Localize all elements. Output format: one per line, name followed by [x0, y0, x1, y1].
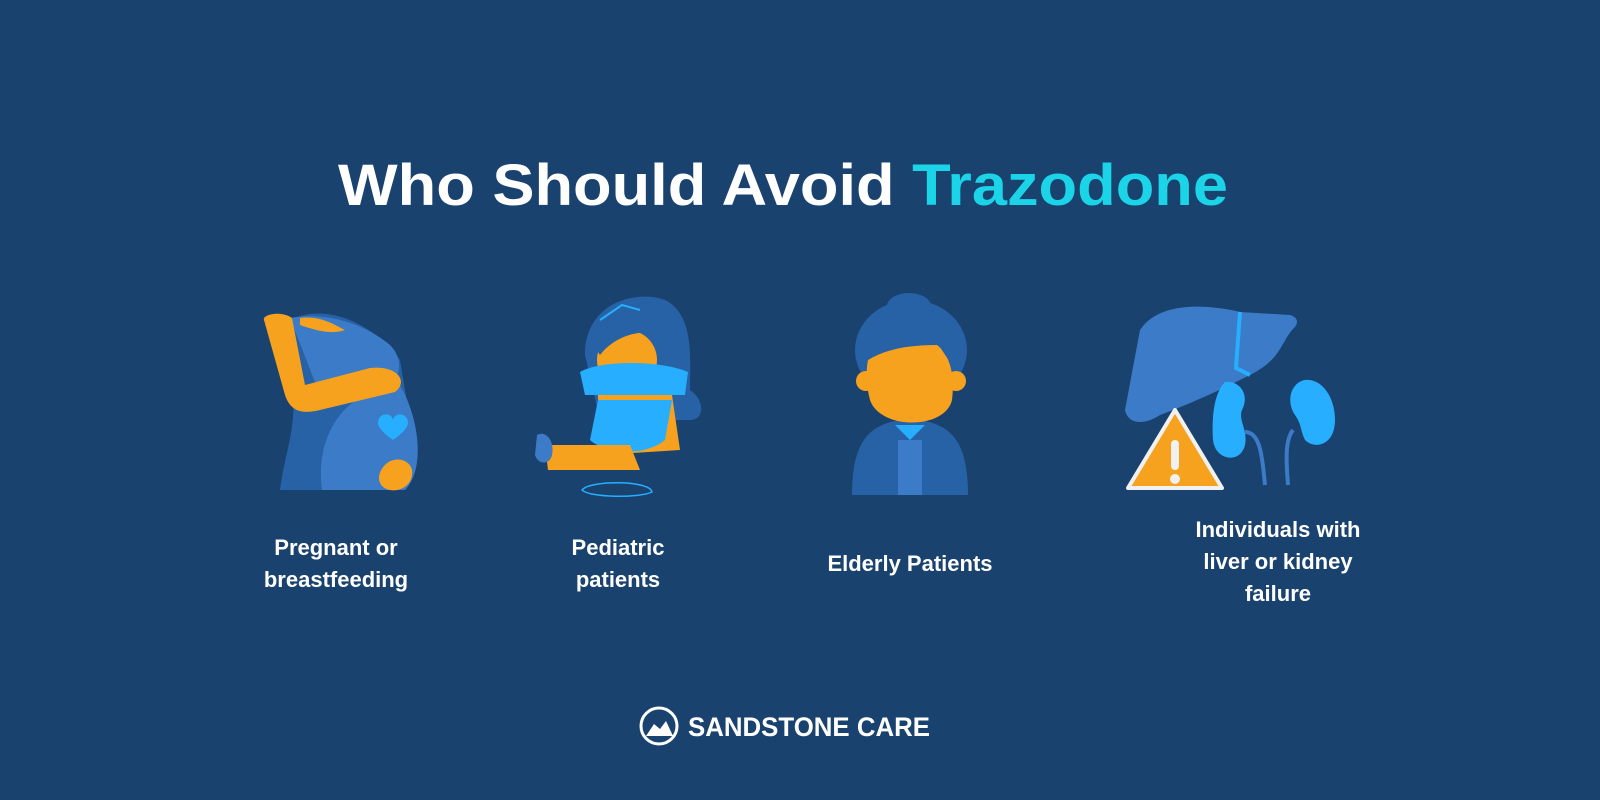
label: pregnant	[264, 535, 408, 592]
title: Who Should Avoid Trazodone	[338, 153, 1228, 218]
logo: SANDSTONE CARE	[688, 712, 930, 742]
label: pregnant: breastfeeding	[264, 567, 408, 592]
icon: elderly woman	[852, 293, 968, 495]
label: liver or kidney: failure	[1245, 581, 1311, 606]
label: liver or kidney: Individuals with	[1195, 517, 1361, 542]
label: pediatric: Pediatric	[572, 535, 664, 560]
label: pediatric	[572, 535, 664, 592]
icon: pregnant woman	[264, 314, 418, 490]
icon: child	[535, 297, 701, 496]
logo	[641, 708, 930, 744]
label: pregnant: Pregnant or	[274, 535, 398, 560]
icon: liver and kidneys with warning	[1125, 307, 1335, 488]
label: liver or kidney: liver or kidney	[1203, 549, 1353, 574]
label: liver or kidney	[1195, 517, 1361, 606]
label: pediatric: patients	[576, 567, 660, 592]
label: elderly: Elderly Patients	[827, 551, 993, 576]
